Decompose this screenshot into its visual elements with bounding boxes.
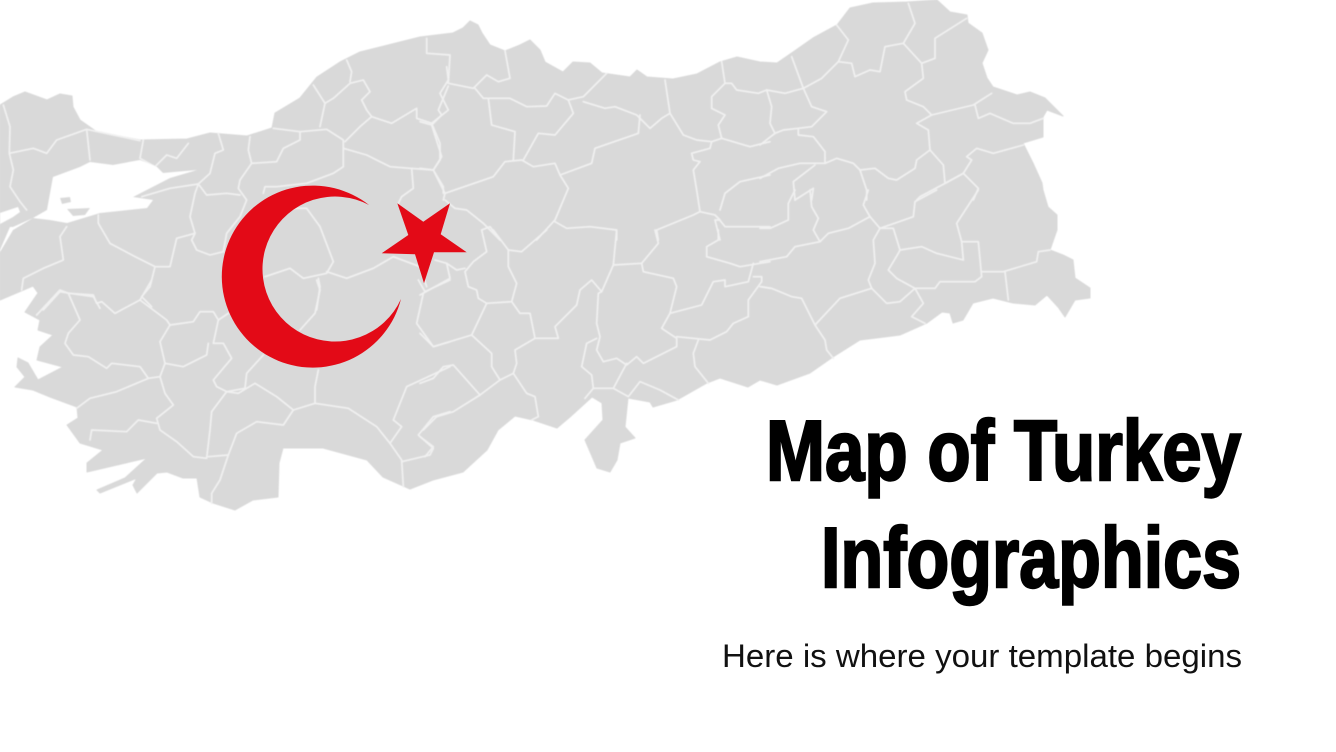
Sea of Marmara xyxy=(0,160,197,252)
subtitle: Here is where your template begins xyxy=(722,638,1242,674)
title: Infographics xyxy=(821,511,1241,606)
title: Map of Turkey xyxy=(766,404,1241,499)
Dardanelles strait xyxy=(0,207,20,224)
icon: star xyxy=(382,203,467,283)
map landmass outline xyxy=(0,0,1090,510)
Marmara islands xyxy=(60,197,90,216)
province borders xyxy=(3,3,1050,503)
icon: crescent xyxy=(222,186,401,368)
title xyxy=(766,404,1241,606)
map of Turkey xyxy=(0,0,1090,510)
